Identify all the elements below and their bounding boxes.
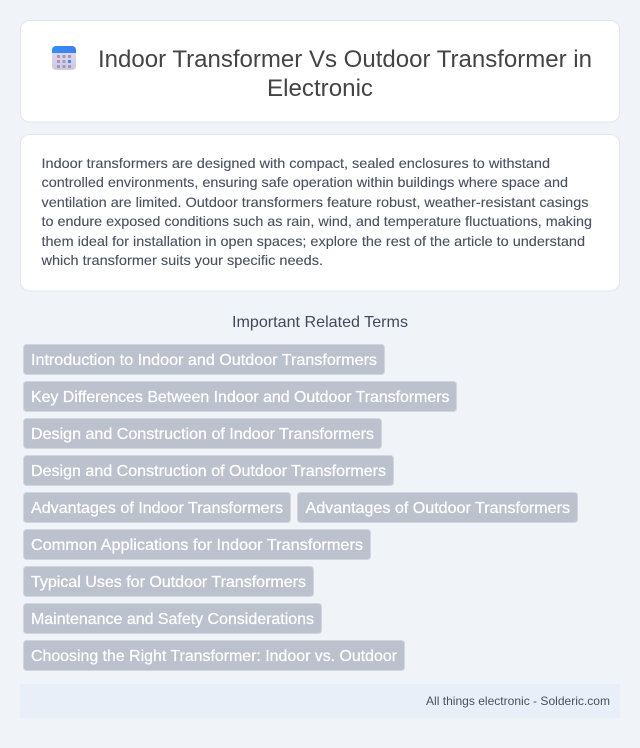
tag: key differences: Key Differences Between Indoor and Outdoor Transformers (31, 389, 450, 406)
text block: introduction: Indoor transformers are designed with compact, sealed enclosures to withstand (42, 155, 550, 171)
text block: introduction: ventilation are limited. Outdoor transformers feature robust, weather-resistant casings (42, 194, 588, 210)
tag: indoor design: Design and Construction of Indoor Transformers (31, 426, 374, 443)
text block: introduction: controlled environments, ensuring safe operation within buildings where space and (42, 174, 568, 190)
tag: indoor applications (24, 530, 370, 560)
heading: important related terms: Important Related Terms (232, 314, 408, 331)
title: Electronic (267, 75, 373, 102)
tag: outdoor design (24, 456, 394, 486)
tag: indoor applications: Common Applications for Indoor Transformers (31, 537, 363, 554)
tag: key differences (24, 382, 456, 412)
footer (20, 684, 620, 718)
tag list (24, 344, 578, 670)
tag: outdoor uses: Typical Uses for Outdoor Transformers (31, 574, 306, 591)
tag: outdoor uses (24, 566, 314, 596)
tag: indoor advantages: Advantages of Indoor Transformers (31, 500, 283, 517)
icon: calendar (52, 46, 76, 70)
tag: introduction: Introduction to Indoor and Outdoor Transformers (31, 352, 377, 369)
tag: outdoor advantages (298, 492, 578, 522)
tag: maintenance (24, 604, 322, 634)
tag: indoor design (24, 418, 382, 448)
text block: introduction (40, 155, 592, 268)
footer: All things electronic - Solderic.com (426, 694, 610, 708)
title: Indoor Transformer Vs Outdoor Transformer in (98, 46, 592, 73)
tag: introduction (24, 344, 384, 374)
text block: introduction: to endure exposed conditions such as rain, wind, and temperature fluctuations, making (42, 213, 592, 229)
tag: outdoor advantages: Advantages of Outdoor Transformers (306, 500, 570, 517)
tag: maintenance: Maintenance and Safety Considerations (31, 611, 314, 628)
tag: outdoor design: Design and Construction of Outdoor Transformers (31, 463, 386, 480)
text block: introduction: which transformer suits your specific needs. (40, 252, 323, 268)
tag: choosing (24, 640, 404, 670)
tag: choosing: Choosing the Right Transformer: Indoor vs. Outdoor (31, 648, 398, 665)
panel: title card (20, 20, 620, 122)
tag: indoor advantages (24, 492, 290, 522)
panel: introduction text (20, 134, 620, 291)
text block: introduction: them ideal for installation in open spaces; explore the rest of the article to understand (42, 233, 585, 249)
title (98, 46, 592, 102)
